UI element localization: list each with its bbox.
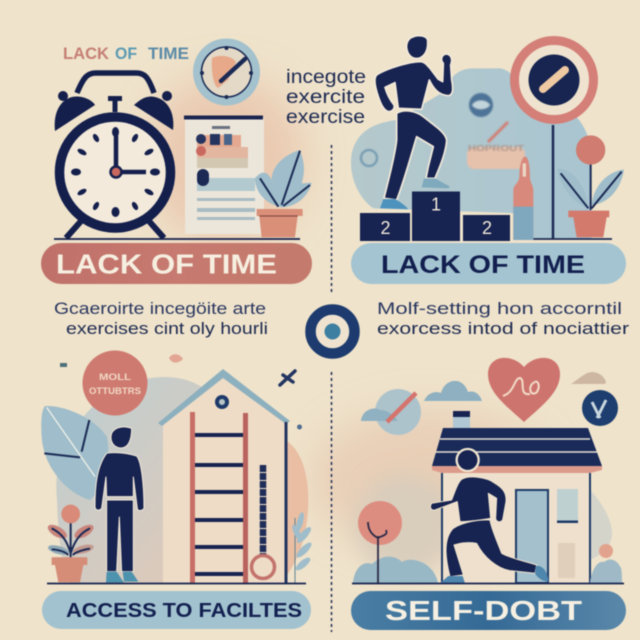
panel: lack of time clock (41, 38, 312, 284)
label pill: self-doubt: SELF-DOBT (385, 595, 582, 626)
icon: ladder (190, 412, 248, 583)
icon: rope and ring (252, 465, 274, 578)
label pill: lack of time (351, 243, 626, 284)
icon: target (310, 310, 354, 354)
panel: podium figure (351, 36, 626, 284)
icon: gauge (193, 38, 260, 106)
text block: right caption: exorcess intod of nociattier (377, 319, 629, 338)
label pill: self-doubt (351, 591, 626, 630)
small heading: OF (115, 45, 137, 63)
icon: fern (290, 512, 314, 583)
icon: shoes (380, 178, 450, 209)
icon: bottle (513, 157, 533, 240)
figure: climbing person (375, 36, 453, 200)
panel: self-doubt (351, 358, 626, 630)
icon: badge (582, 390, 618, 426)
text block: right caption: Molf-setting hon accorntil (377, 299, 622, 318)
icon: heart (488, 358, 560, 422)
small heading: TIME (148, 45, 189, 63)
icon: potted plant (255, 150, 312, 237)
notepad (184, 116, 264, 234)
icon: house (432, 411, 602, 583)
figure: running person (431, 449, 537, 577)
text block: left caption: exercises cint oly hourli (66, 319, 268, 338)
small heading: LACK (63, 45, 109, 63)
label pill: lack of time: LACK OF TIME (56, 248, 277, 280)
figure: standing person (95, 427, 144, 572)
podium: 2 (380, 218, 391, 238)
icon: leaf (41, 406, 108, 500)
icon: shoes (106, 572, 138, 583)
backdrop (355, 475, 455, 575)
text block: incegote exercise: exercise (286, 107, 365, 128)
panel: access to facilities (41, 350, 314, 629)
label pill: access to facilities (42, 591, 311, 629)
dashed divider (330, 145, 332, 632)
badge circle (82, 350, 148, 416)
podium (360, 192, 510, 241)
icon: clouds and moon (361, 372, 606, 435)
podium: 1 (431, 194, 441, 214)
faint icon: smudge note: HOPROUT (468, 144, 524, 153)
text block: incegote exercise: incegote (286, 67, 366, 88)
icon: small marks (60, 354, 302, 430)
text block: right caption (377, 299, 629, 338)
icon: tree and bushes (353, 501, 622, 583)
icon: alarm clock (55, 73, 173, 238)
small heading (63, 45, 189, 63)
blue backdrop (351, 68, 592, 238)
icon: potted flower (46, 505, 96, 582)
badge circle: OTTUBTRS (89, 386, 141, 396)
label pill: lack of time: LACK OF TIME (381, 251, 585, 279)
text block: left caption: Gcaeroirte incegöite arte (54, 299, 266, 318)
text block: incegote exercise: exercite (286, 87, 365, 108)
backdrop (56, 377, 240, 583)
icon: shoes (440, 566, 548, 583)
icon: shed (158, 369, 290, 583)
badge circle: MOLL (99, 372, 132, 382)
podium: 2 (482, 218, 492, 238)
faint icon: smudge note (361, 93, 525, 169)
text block: incegote exercise (286, 67, 366, 128)
label pill: access to facilities: ACCESS TO FACILTES (66, 600, 302, 622)
icon: flower pot (557, 135, 624, 237)
text block: left caption (54, 299, 268, 338)
label pill: lack of time (41, 243, 312, 284)
icon: prohibition sign (514, 40, 612, 239)
